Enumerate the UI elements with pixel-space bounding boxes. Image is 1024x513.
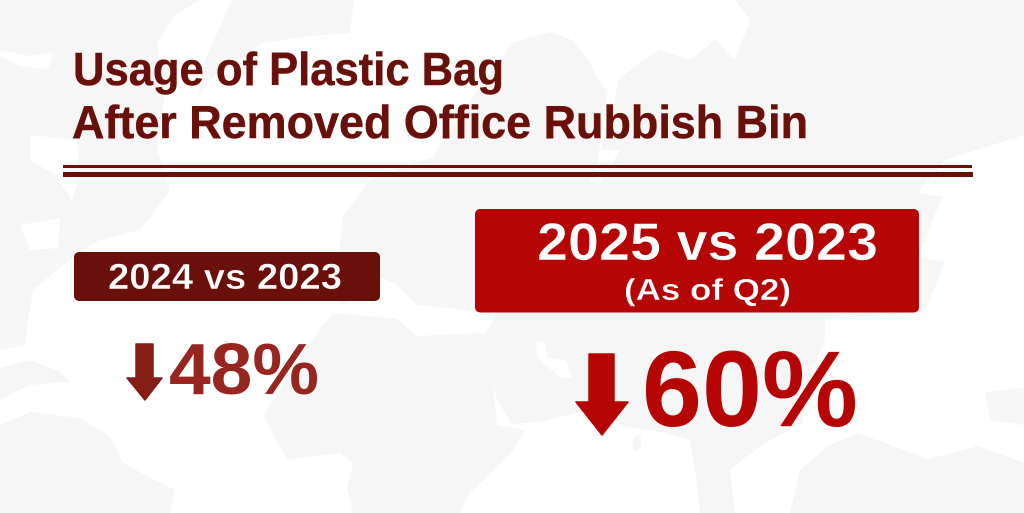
label box 2024 vs 2023 [74, 252, 380, 301]
map: Indonesia and Australia [790, 433, 1024, 513]
map: North America [0, 0, 200, 350]
label box 2025 vs 2023 as of Q2: (As of Q2) [624, 272, 791, 307]
panel: 2024 vs 2023 [74, 252, 380, 410]
map: Central America [0, 360, 70, 400]
value 60%: 60% [642, 328, 858, 449]
icon: small down arrow [127, 344, 162, 400]
map: Europe and Asia [335, 0, 1024, 513]
map: South America [0, 412, 175, 513]
title divider double rule [63, 165, 973, 177]
value 48%: 48% [169, 330, 319, 410]
label box 2025 vs 2023 as of Q2 [475, 209, 919, 312]
map: Persian Gulf and inland water [536, 20, 632, 378]
map: Africa [263, 313, 525, 513]
title line 1: Usage of Plastic Bag [73, 43, 504, 95]
icon: large down arrow [576, 354, 628, 435]
map: Sri Lanka [632, 434, 641, 452]
label box 2025 vs 2023 as of Q2: 2025 vs 2023 [537, 213, 878, 272]
map: Greenland [197, 0, 354, 97]
label box 2024 vs 2023: 2024 vs 2023 [108, 256, 342, 297]
title line 2: After Removed Office Rubbish Bin [72, 96, 808, 148]
map: New Guinea [985, 388, 1024, 425]
title [72, 43, 808, 148]
panel: 2025 vs 2023 [475, 209, 919, 449]
